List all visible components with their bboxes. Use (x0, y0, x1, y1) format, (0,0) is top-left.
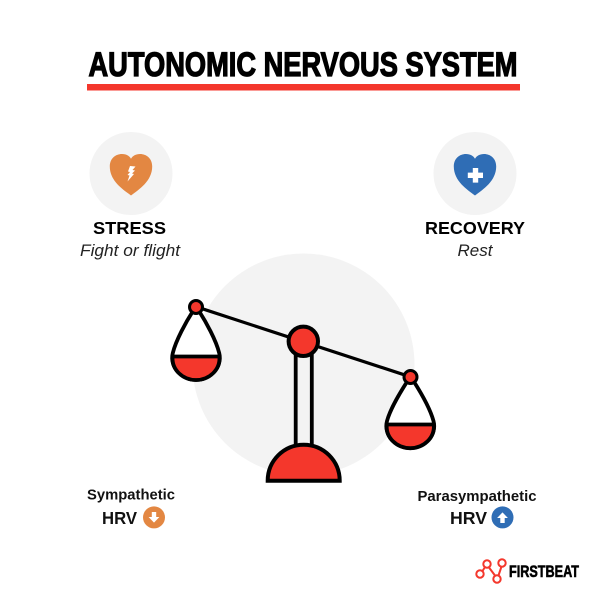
label: sympathetic hrv: Sympathetic (87, 488, 175, 504)
icon: down arrow (143, 506, 165, 528)
balance scale (172, 300, 434, 481)
column (296, 352, 312, 448)
pivot (289, 327, 318, 356)
subheading: fight or flight: Fight or flight (80, 241, 181, 260)
heading: stress: STRESS (93, 218, 166, 238)
panel: stress (80, 132, 181, 260)
panel: recovery (425, 132, 525, 260)
left pan (172, 300, 220, 380)
beam (196, 307, 410, 377)
base (268, 445, 340, 481)
icon: up arrow (492, 506, 514, 528)
background circle (192, 254, 414, 476)
icon: stress heart (90, 132, 172, 215)
icon: logo network (476, 559, 506, 583)
logo: firstbeat: FIRSTBEAT (509, 563, 579, 581)
heading: recovery: RECOVERY (425, 218, 525, 238)
label: parasympathetic hrv (418, 489, 536, 528)
label: parasympathetic hrv: Parasympathetic (418, 489, 536, 505)
label: sympathetic hrv (87, 488, 175, 528)
right pan (386, 370, 434, 448)
subheading: rest: Rest (458, 241, 494, 260)
logo: firstbeat (476, 559, 579, 583)
icon: recovery heart (434, 132, 516, 215)
label: sympathetic hrv: HRV (102, 508, 137, 528)
label: parasympathetic hrv: HRV (450, 508, 487, 528)
